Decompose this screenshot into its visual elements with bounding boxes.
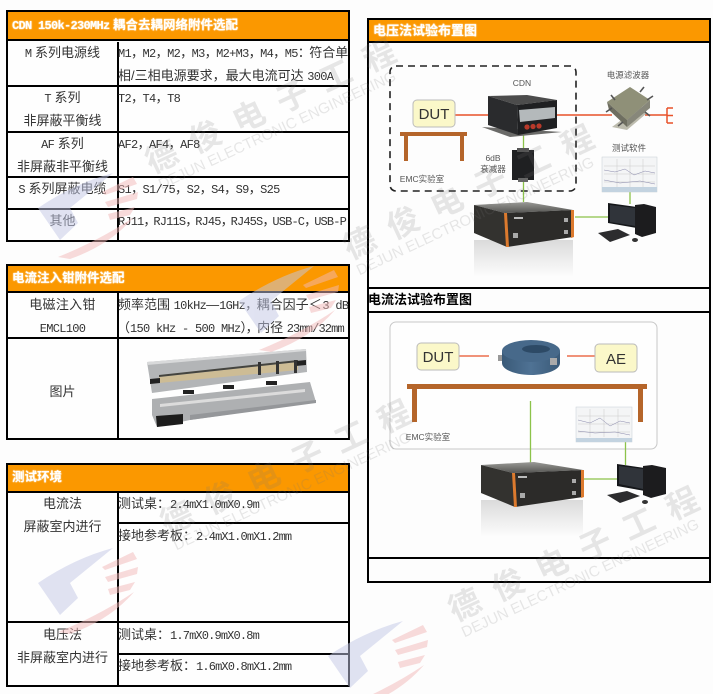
watermark: logo 2 (239, 266, 339, 352)
device: main instrument (474, 202, 574, 247)
divider: between diagrams (369, 287, 709, 289)
device: main instrument (481, 462, 584, 507)
row: T series (8, 85, 348, 131)
cell: ground plane size 2: 接地参考板：1.6mX0.8mX1.2mm (118, 658, 291, 674)
test table (400, 132, 467, 161)
cell: ground plane size 1 (118, 522, 348, 622)
label: 6dB attenuator: 衰减器 (480, 164, 506, 174)
row: current method (8, 491, 348, 621)
heading: test environment (8, 465, 348, 491)
EMC lab dashed boundary (390, 66, 576, 191)
row: AF series (8, 131, 348, 176)
row: voltage method: 非屏蔽室内进行 (17, 650, 108, 664)
row: S series: S1，S1/75，S2，S4，S9，S25 (118, 181, 280, 197)
cell: test table size 1: 测试桌：2.4mX1.0mX0.9m (118, 496, 259, 512)
row: EMCL100: 频率范围 10kHz—1GHz，耦合因子＜ 3 dB (118, 297, 348, 313)
label: CDN: CDN (513, 78, 531, 88)
watermark: company name 4: 德俊电子工程 (443, 474, 713, 628)
box: AE: AE (606, 351, 626, 368)
row: M series (8, 39, 348, 85)
image: injection clamp (147, 349, 316, 427)
watermark: company name 3: DEJUN ELECTRONIC ENGINEERING (171, 429, 414, 554)
row: picture: 图片 (49, 384, 76, 399)
row: others: 其他 (49, 213, 76, 228)
row: S series: S 系列屏蔽电缆 (18, 181, 107, 197)
label: EMC lab: EMC实验室 (406, 432, 451, 442)
watermark: company name 2: 德俊电子工程 (338, 112, 614, 266)
device: attenuator (512, 148, 534, 182)
row: AF series: AF2，AF4，AF8 (118, 136, 200, 152)
row: picture (8, 337, 348, 440)
heading: clamp accessories: 电流注入钳附件选配 (12, 271, 125, 285)
screenshot: test software (602, 157, 657, 192)
row: T series: T2，T4，T8 (118, 90, 180, 106)
row: M series: M1，M2，M2，M3，M2+M3，M4，M5：符合单 (118, 45, 348, 61)
box: DUT (413, 100, 455, 127)
divider: empty bottom row (369, 557, 709, 559)
box: DUT: DUT (419, 106, 449, 123)
heading: CDN accessories: CDN 150k-230MHz 耦合去耦网络附件选配 (12, 18, 238, 33)
panel: current injection clamp accessories table (6, 264, 350, 440)
watermark: logo 1 (38, 173, 138, 259)
red signal cables (459, 355, 595, 357)
test table (407, 384, 647, 422)
cell: ground plane size 2 (118, 653, 348, 687)
EMC lab boundary (390, 322, 657, 449)
device: current clamp (498, 340, 560, 375)
screenshot: test software (576, 407, 632, 442)
row: M series: 相/三相电源要求，最大电流可达 300A (118, 68, 333, 84)
label: power filter: 电源滤波器 (607, 70, 650, 80)
diagram: voltage method layout (369, 41, 709, 287)
row: T series: T 系列 (44, 90, 81, 106)
label: 6dB attenuator: 6dB (485, 153, 501, 163)
heading: test environment: 测试环境 (12, 470, 62, 484)
row: EMCL100: 电磁注入钳 (29, 297, 96, 312)
row: others (8, 208, 348, 242)
label: EMC lab: EMC实验室 (400, 174, 445, 184)
heading: voltage method layout (369, 20, 709, 41)
diagram: current method layout (369, 311, 709, 557)
panel: CDN accessories table (6, 10, 350, 242)
red signal cables (455, 108, 673, 123)
row: voltage method (8, 621, 348, 685)
device: CDN box (482, 95, 562, 137)
green connection cables (524, 134, 630, 217)
instrument reflection (474, 240, 573, 277)
device: power filter (606, 87, 653, 130)
row: EMCL100: （150 kHz - 500 MHz），内径 23mm/32mm (118, 320, 344, 336)
heading: voltage method layout: 电压法试验布置图 (373, 23, 477, 38)
instrument reflection (481, 500, 583, 537)
watermark: company name 2: DEJUN ELECTRONIC ENGINEERING (354, 154, 597, 279)
device: computer (598, 203, 656, 242)
watermark: logo 4 (328, 621, 428, 694)
row: S series (8, 176, 348, 208)
watermark: company name 1: 德俊电子工程 (140, 26, 416, 180)
row: T series: 非屏蔽平衡线 (23, 112, 102, 128)
device: computer (607, 464, 666, 504)
row: voltage method: 电压法 (43, 627, 82, 642)
watermark: logo 3 (38, 548, 138, 634)
box: AE (595, 344, 637, 372)
watermark: company name 1: DEJUN ELECTRONIC ENGINEERING (156, 68, 399, 193)
watermark: company name 4: DEJUN ELECTRONIC ENGINEERING (459, 516, 702, 641)
row: current method: 电流法 (43, 496, 82, 511)
row: AF series: AF 系列 (41, 136, 84, 152)
row: current method: 屏蔽室内进行 (23, 518, 102, 534)
row: others: RJ11，RJ11S，RJ45，RJ45S，USB-C，USB-P (118, 213, 346, 229)
label: test software: 测试软件 (612, 143, 646, 153)
heading: clamp accessories (8, 266, 348, 291)
box: DUT (417, 343, 459, 370)
cell: test table size 2: 测试桌：1.7mX0.9mX0.8m (118, 627, 259, 643)
row: AF series: 非屏蔽非平衡线 (17, 158, 108, 174)
box: DUT: DUT (423, 349, 453, 366)
cell: ground plane size 1: 接地参考板：2.4mX1.0mX1.2mm (118, 528, 291, 544)
row: M series: M 系列电源线 (25, 45, 100, 61)
green connection cables (530, 401, 626, 479)
row: EMCL100 (8, 291, 348, 337)
row: EMCL100: EMCL100 (40, 322, 85, 336)
heading: current method layout: 电流法试验布置图 (368, 292, 472, 307)
panel: layout diagrams table (367, 18, 711, 583)
watermark: company name 3: 德俊电子工程 (155, 387, 431, 541)
panel: test environment table (6, 463, 350, 687)
heading: CDN accessories (8, 12, 348, 39)
